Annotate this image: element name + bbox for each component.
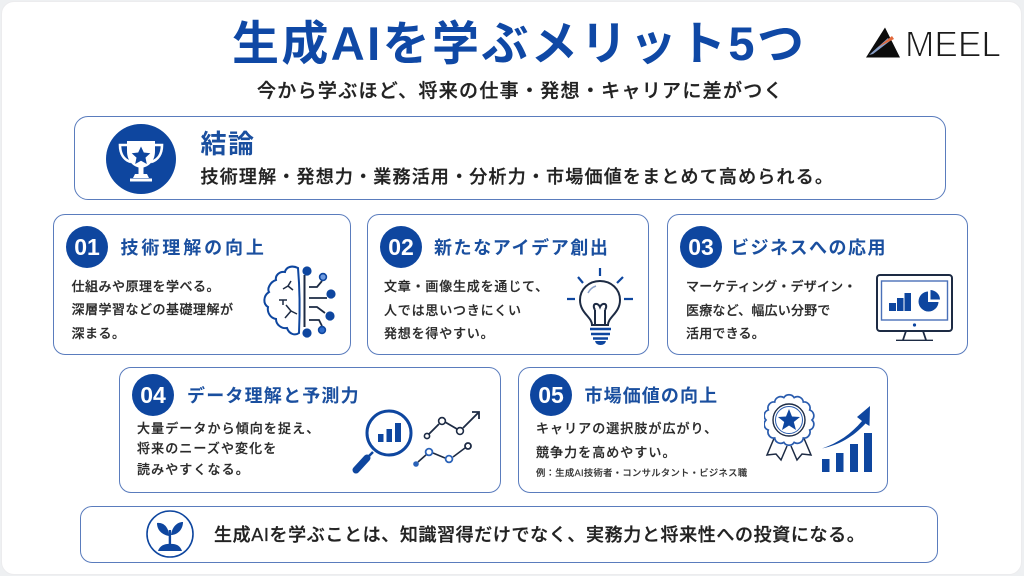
panel: conclusion [74,116,946,200]
body text 04 [137,420,320,477]
icon: medal and rising chart [764,394,872,472]
panel: closing message [80,506,938,563]
number badge 05 [530,374,572,416]
panel: 04 data understanding [119,367,501,493]
panel: 03 business application [667,214,968,355]
body text 01 [72,278,234,340]
body text 04: 読みやすくなる。 [137,462,250,477]
number badge 03: 03 [688,234,714,260]
body text 03: マーケティング・デザイン・ [686,279,857,294]
title: 生成AIを学ぶメリット5つ [232,17,806,70]
conclusion heading: 結論 [200,129,256,159]
number badge 02 [380,226,422,268]
heading 01: 技術理解の向上 [120,238,267,258]
icon: monitor with charts [876,274,953,341]
closing text: 生成AIを学ぶことは、知識習得だけでなく、実務力と将来性への投資になる。 [214,525,865,545]
icon: sprout [146,510,194,558]
body text 05 [536,421,718,460]
number badge 01: 01 [74,234,100,260]
body text 01: 深まる。 [72,326,126,340]
heading 04: データ理解と予測力 [187,386,360,406]
number badge 04: 04 [140,382,166,408]
panel: 02 new ideas [367,214,649,355]
body text 02: 人では思いつきにくい [384,302,522,318]
body text 02: 発想を得やすい。 [384,326,494,341]
body text 05: 競争力を高めやすい。 [536,444,677,460]
number badge 04 [132,374,174,416]
body text 03 [686,279,857,341]
panel: 05 market value [518,367,888,493]
heading 05: 市場価値の向上 [584,386,718,406]
body text 05: キャリアの選択肢が広がり、 [536,421,718,436]
body text 03: 医療など、幅広い分野で [686,302,831,318]
number badge 05: 05 [538,382,564,408]
body text 03: 活用できる。 [686,326,765,341]
body text 04: 大量データから傾向を捉え、 [137,420,320,436]
icon: trophy [106,124,176,194]
conclusion text: 技術理解・発想力・業務活用・分析力・市場価値をまとめて高められる。 [200,167,834,187]
icon: AI brain circuit [263,266,336,338]
icon: light bulb [567,268,633,345]
icon: magnifier and trend lines [352,410,480,474]
panel: 01 technical understanding [53,214,351,355]
body text 02 [384,279,549,341]
example note: 例：生成AI技術者・コンサルタント・ビジネス職 [536,468,747,478]
body text 01: 仕組みや原理を学べる。 [72,278,220,294]
number badge 02: 02 [388,234,414,260]
subtitle: 今から学ぶほど、将来の仕事・発想・キャリアに差がつく [257,81,784,102]
body text 02: 文章・画像生成を通じて、 [384,279,549,294]
body text 04: 将来のニーズや変化を [137,441,277,456]
heading 03: ビジネスへの応用 [731,238,887,258]
number badge 03 [680,226,722,268]
heading 02: 新たなアイデア創出 [434,238,610,258]
number badge 01 [66,226,108,268]
body text 01: 深層学習などの基礎理解が [72,302,234,317]
logo: MEEL [905,24,1001,64]
